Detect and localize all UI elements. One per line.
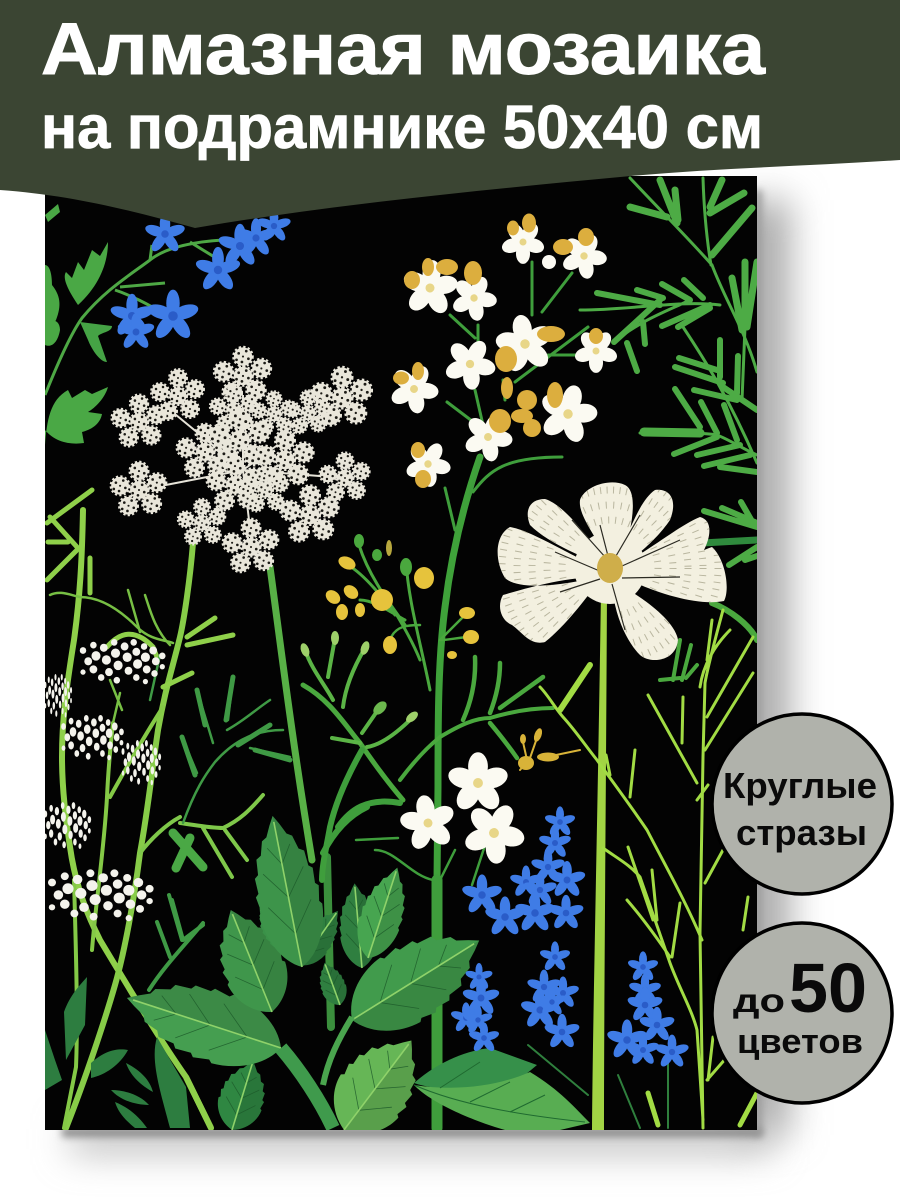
big white flower <box>498 482 727 660</box>
tall lime stem and right grasses <box>540 590 757 1130</box>
badge: round rhinestones: Круглые <box>723 765 877 806</box>
green buds <box>299 631 420 725</box>
blue flower spikes <box>450 806 690 1069</box>
title line 1: Алмазная мозаика <box>41 9 767 90</box>
badge: round rhinestones: стразы <box>736 812 867 853</box>
left grasses <box>47 490 290 1128</box>
top-left parsley plant <box>45 204 223 445</box>
lower-left dark sprigs <box>45 977 211 1128</box>
canvas artwork <box>44 176 757 1152</box>
yellow petals of top flowers <box>393 214 603 488</box>
white small clusters <box>44 639 166 921</box>
green stems <box>270 262 757 1128</box>
title line 2: на подрамнике 50х40 см <box>41 93 763 161</box>
top-right rosemary sprigs <box>580 178 757 565</box>
Queen Anne's lace umbel <box>111 347 371 572</box>
top-left blue flowers <box>109 209 292 350</box>
leaves <box>127 816 590 1130</box>
badge: up to 50 colours: цветов <box>737 1023 863 1061</box>
badge: up to 50 colours: 50 <box>789 949 867 1027</box>
yellow buds <box>323 534 559 770</box>
badge: up to 50 colours <box>712 923 892 1103</box>
white flowers <box>384 220 619 876</box>
badge: round rhinestones <box>712 714 892 894</box>
badge: up to 50 colours: до <box>733 982 785 1019</box>
header banner <box>0 0 900 228</box>
canvas side shadow <box>62 190 790 1153</box>
